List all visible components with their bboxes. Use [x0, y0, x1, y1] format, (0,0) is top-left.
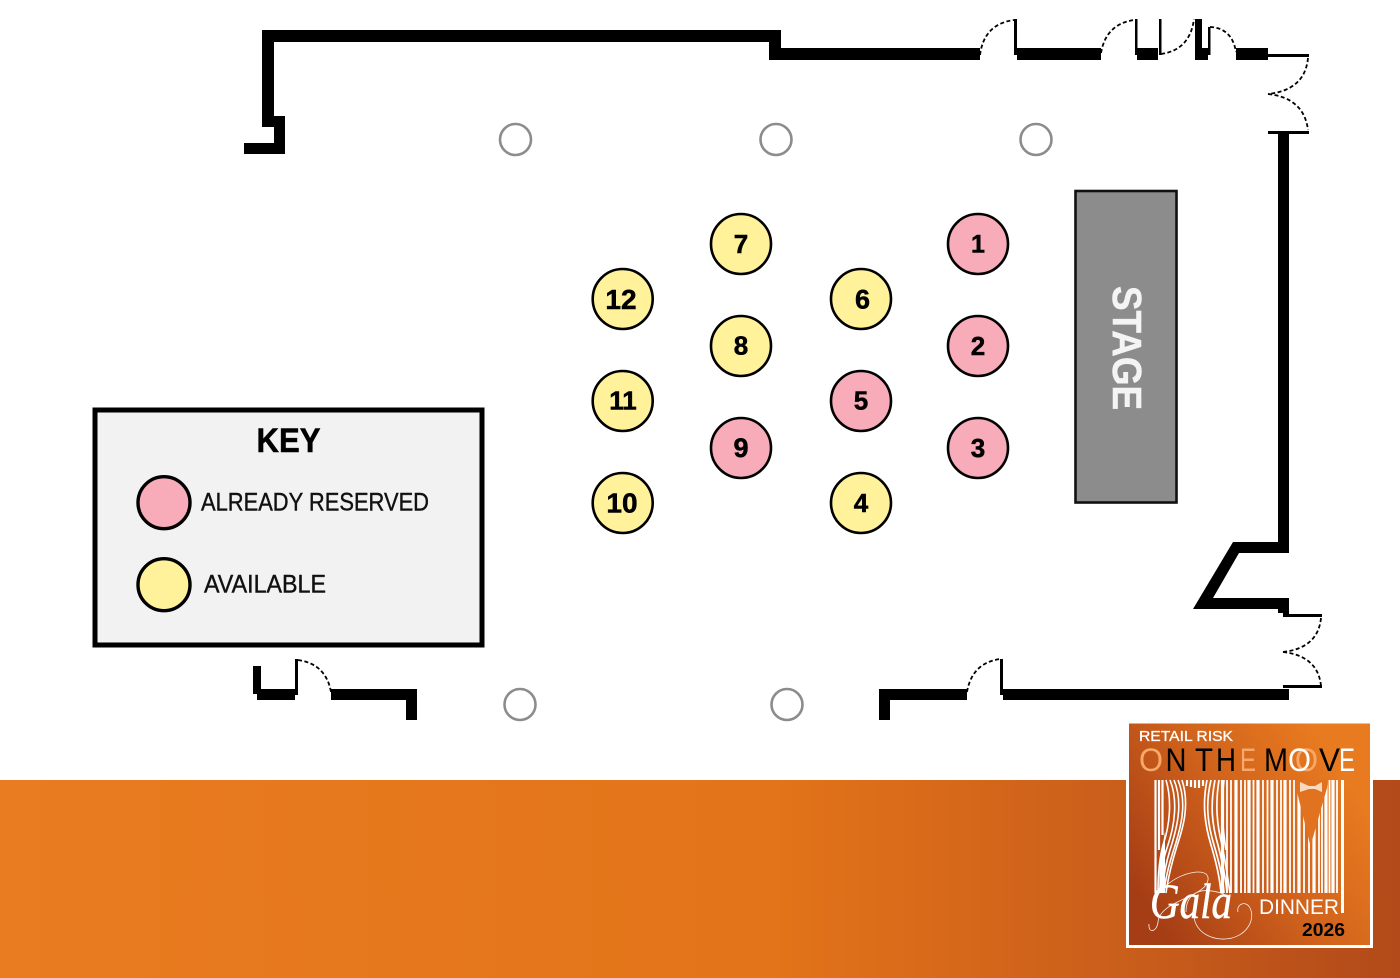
key heading: KEY	[256, 422, 321, 460]
table 8 available	[711, 316, 771, 376]
logo: on the move: E	[1240, 742, 1256, 778]
table 2 reserved	[948, 316, 1008, 376]
table 10 available: 10	[606, 488, 638, 518]
table 5 reserved	[831, 371, 891, 431]
table 4 available: 4	[854, 488, 869, 518]
table 10 available	[593, 473, 653, 533]
table 2 reserved: 2	[971, 331, 985, 361]
door swings	[298, 19, 1321, 692]
logo: on the move	[1139, 742, 1355, 778]
key: already reserved: ALREADY RESERVED	[201, 488, 429, 516]
table 1 reserved	[948, 214, 1008, 274]
logo: on the move: H	[1216, 742, 1236, 778]
key panel	[95, 410, 482, 645]
tables	[593, 214, 1008, 533]
logo: dinner label: DINNER	[1259, 896, 1339, 919]
logo: retail risk: RETAIL RISK	[1139, 728, 1233, 745]
table 9 reserved	[711, 418, 771, 478]
logo: on the move: O	[1288, 742, 1311, 778]
logo: on the move: E	[1339, 742, 1355, 778]
key: available: AVAILABLE	[204, 570, 326, 598]
logo: on the move: T	[1195, 742, 1213, 778]
table 3 reserved	[948, 418, 1008, 478]
logo: gala script: Gala	[1150, 873, 1232, 929]
stage: STAGE	[1104, 286, 1150, 410]
orange footer band	[0, 780, 1400, 978]
logo: on the move: O	[1139, 742, 1163, 778]
logo: on the move: O	[1295, 742, 1318, 778]
table 11 available: 11	[609, 386, 637, 416]
table 12 available	[593, 269, 653, 329]
logo: on the move: M	[1264, 742, 1288, 778]
gala dinner logo	[1128, 722, 1372, 946]
table 4 available	[831, 473, 891, 533]
table 6 available	[831, 269, 891, 329]
table 11 available	[593, 371, 653, 431]
key: already reserved	[138, 477, 429, 529]
logo: year: 2026	[1302, 920, 1345, 940]
stage	[1076, 191, 1176, 502]
logo: on the move: V	[1319, 742, 1341, 778]
logo: barcode with dress and tuxedo	[1156, 780, 1342, 913]
logo: on the move: N	[1166, 742, 1186, 778]
table 5 reserved: 5	[854, 386, 868, 416]
table 6 available: 6	[855, 284, 870, 314]
table 12 available: 12	[605, 284, 637, 315]
floor plan walls	[244, 19, 1322, 720]
table 7 available	[711, 214, 771, 274]
table 8 available: 8	[734, 330, 748, 360]
table 1 reserved: 1	[971, 230, 985, 258]
table 3 reserved: 3	[971, 433, 985, 463]
key: available	[138, 559, 326, 611]
table 7 available: 7	[734, 229, 748, 259]
pillars	[500, 124, 1052, 720]
table 9 reserved: 9	[733, 433, 749, 463]
